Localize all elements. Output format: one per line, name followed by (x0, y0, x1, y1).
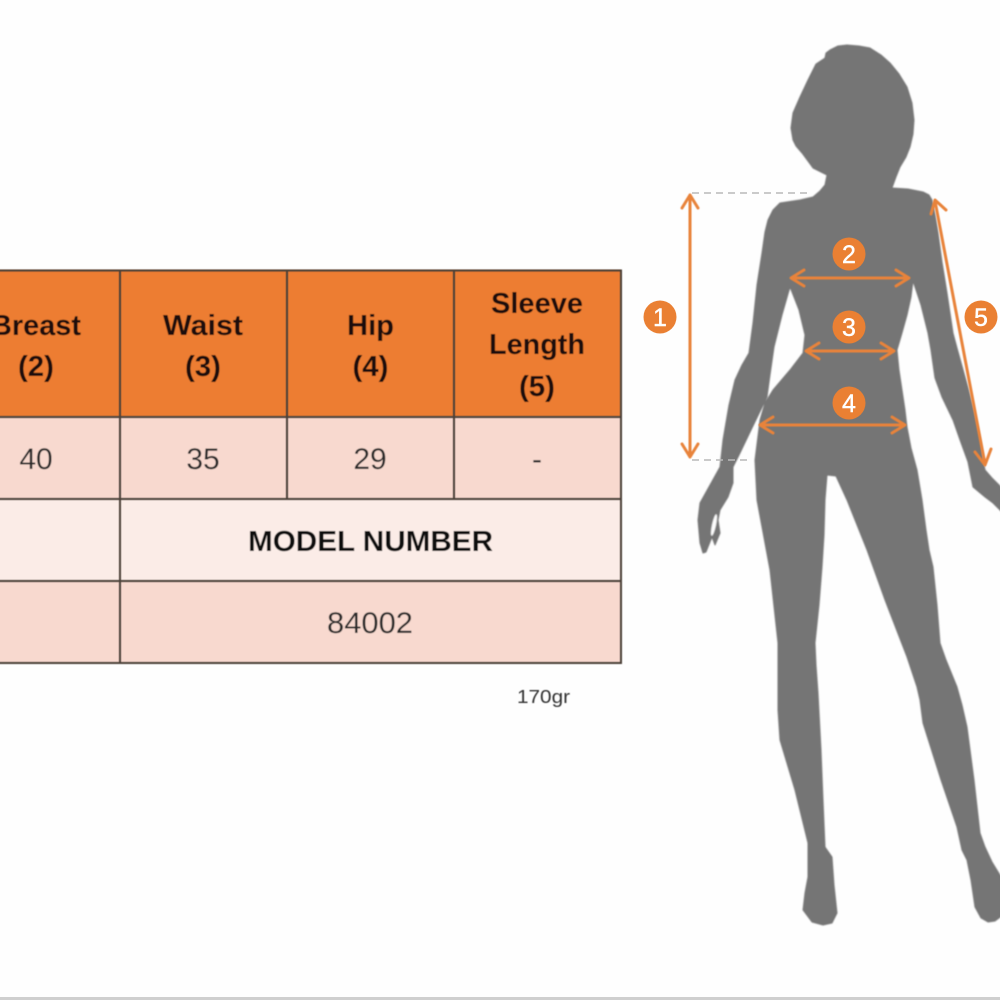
table measurement row: 40 (19, 443, 53, 476)
body silhouette (698, 45, 1000, 925)
dashed guide lines (692, 193, 808, 460)
badge 3 (832, 310, 866, 344)
model number heading row (0, 499, 621, 581)
table header row: (4) (352, 351, 388, 383)
icon: gap between fingers (710, 514, 718, 536)
badge 5: 5 (974, 304, 988, 332)
badge 1: 1 (653, 304, 667, 332)
arrow 5: sleeve (931, 200, 991, 465)
arrow 1: length (682, 195, 698, 457)
table measurement row: 29 (353, 443, 387, 476)
badge 1 (644, 300, 676, 334)
badge 2 (832, 238, 866, 270)
arrow 3: waist (806, 343, 894, 359)
size table (0, 270, 621, 663)
model number value row: 84002 (327, 607, 413, 640)
badge 4 (832, 386, 866, 420)
table header row: (3) (185, 351, 221, 383)
model number value row (0, 581, 621, 663)
table header row: Hip (347, 310, 394, 342)
table header row: Sleeve (491, 288, 583, 320)
table header row (0, 270, 621, 417)
badge 3: 3 (842, 314, 856, 342)
table header row: Waist (163, 310, 243, 342)
model number heading row: MODEL NUMBER (248, 526, 493, 558)
table header row: Length (489, 329, 585, 361)
arrow 2: breast (791, 270, 909, 286)
table measurement row: - (532, 443, 542, 476)
badge 4: 4 (842, 390, 856, 418)
table measurement row (0, 417, 621, 499)
table header row: (2) (18, 351, 54, 383)
table measurement row: 35 (186, 443, 220, 476)
number badges (644, 238, 998, 420)
weight note: 170gr (517, 687, 570, 707)
measurement arrows (682, 195, 991, 465)
badge 5 (964, 300, 998, 334)
badge 2: 2 (842, 241, 856, 269)
table header row: (5) (519, 371, 555, 403)
arrow 4: hip (760, 417, 905, 433)
